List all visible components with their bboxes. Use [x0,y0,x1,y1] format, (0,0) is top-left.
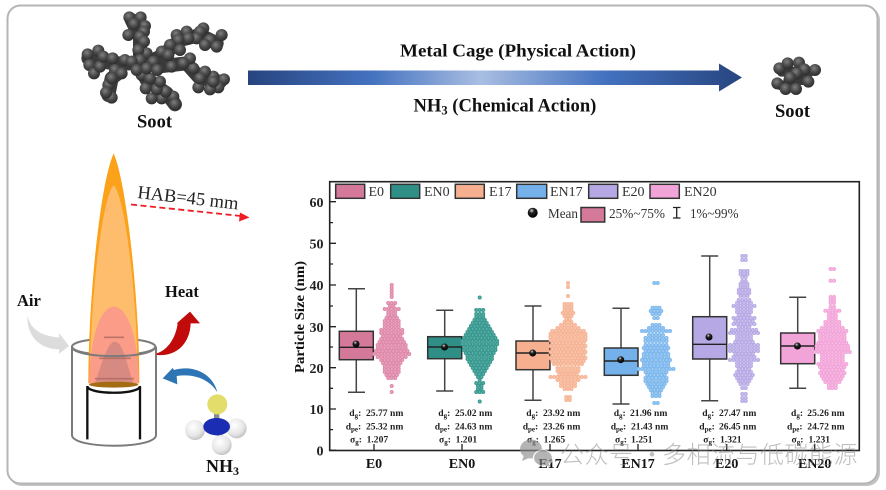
label: HAB: HAB=45 mm [136,183,240,215]
stats: EN0: g [444,412,448,420]
stats: EN17: g [620,439,624,447]
stats: EN20: σ [792,435,797,446]
stats: E0: d [346,422,351,432]
stats: EN17 [611,408,668,447]
stats: EN20: 24.72 nm [807,422,845,432]
stats: EN17: : [623,422,626,432]
stats: E0: g [355,439,359,447]
stats: E17: pe [528,426,535,434]
stats: EN17: d [611,422,616,432]
x axis labels: E20 [715,457,738,472]
stats: EN20: 1.231 [808,435,830,446]
gradient process arrow [248,64,742,92]
stats: EN17: σ [615,435,620,446]
y axis labels: 50 [310,238,324,252]
stats: E20: : [712,435,715,446]
stats: E17: d [523,422,528,432]
arrow: ammonia feed [163,368,217,392]
stats: EN20 [787,408,845,447]
legend: EN17 [550,185,583,200]
y axis labels: 40 [310,279,324,294]
burner and flame [72,153,156,446]
stats: EN0: d [438,408,444,419]
stats: EN20: d [787,422,792,432]
stats: EN17: 21.96 nm [630,408,667,419]
box plot: E20 [693,256,727,401]
stats: E0: 25.77 nm [366,408,403,419]
label: NH3 chemical action: 3 [441,104,448,118]
stats: E17: : [535,408,538,419]
stats: EN0: d [435,422,440,432]
swarm: E0 [374,285,409,392]
label: NH3: 3 [233,464,239,478]
label: NH3: NH [206,456,233,476]
stats: E20: g [708,412,712,420]
box plot: E17 [516,306,550,400]
x axis labels: EN20 [798,457,831,472]
y axis labels: 60 [310,196,324,211]
y axis labels: 0 [316,444,324,460]
stats: E0: : [358,422,361,432]
swarm: E17 [550,283,586,400]
arrow: air [27,315,69,354]
ammonia molecule [185,394,247,455]
stats: EN0: : [448,435,451,446]
watermark text: 公众号 [560,435,634,470]
stats: EN20: g [796,412,800,420]
stats: EN17: : [624,435,627,446]
swarm: EN20 [815,269,850,388]
soot aggregate small [771,57,821,95]
stats: E0 [346,408,403,447]
x axis labels: E17 [538,457,562,472]
label: NH3 chemical action: NH [414,96,441,116]
box plot: EN0 [428,310,462,391]
legend: E0 [368,185,384,200]
stats: E20: : [711,408,714,419]
label: soot left: Soot [137,112,173,132]
stats: E17: 23.26 nm [543,422,580,432]
label: heat: Heat [165,282,199,301]
stats: EN20: : [800,435,803,446]
stats: EN0: 1.201 [456,435,477,446]
y axis labels: 10 [310,403,324,418]
stats: EN20: : [800,408,803,419]
stats: E20: g [709,439,713,447]
stats: EN20: pe [792,426,799,434]
swarm: EN0 [462,298,497,402]
box plot: E0 [339,289,373,392]
label: soot right: Soot [775,102,811,122]
stats: EN0: : [447,408,450,419]
stats: E20: 1.321 [720,435,742,446]
x axis labels [366,457,831,472]
stats: EN0: 24.63 nm [455,422,492,432]
legend: Mean [548,207,578,222]
watermark text: · [640,435,664,470]
stats: EN0 [435,408,492,447]
stats: EN20: d [791,408,796,419]
y axis title: Particle Size (nm) [293,261,308,373]
stats: E20: 26.45 nm [719,422,756,432]
stats: EN17: 21.43 nm [631,422,668,432]
legend: E17 [489,185,512,200]
arrow: heat [157,312,200,355]
stats: EN0: : [447,422,450,432]
stats: EN17: pe [616,426,623,434]
x axis labels: E0 [366,457,382,472]
stats: EN0: g [444,439,448,447]
legend: 25%~75% [609,207,665,222]
stats: E17 [523,408,580,447]
icon: watermark chat [520,440,552,467]
stats: E17: : [535,422,538,432]
label: NH3 chemical action: (Chemical Action) [448,96,596,116]
legend: EN20 [684,185,717,200]
y axis labels: 20 [310,362,324,377]
stats: EN0: pe [440,426,447,434]
stats: E20: d [702,408,708,419]
legend [336,184,739,222]
stats: EN0: σ [439,435,444,446]
stats: E20: pe [705,426,712,434]
stats: E17: g [532,412,536,420]
stats: E0: : [359,435,362,446]
stats: EN20: g [797,439,801,447]
stats: E17: g [532,439,536,447]
x axis labels: EN17 [621,457,655,472]
y axis labels: 30 [310,321,324,336]
stats: E0: : [358,408,361,419]
stats: E17: σ [527,435,532,446]
stats: E20: σ [703,435,709,446]
arrow: HAB dashed [131,204,250,222]
stats: E0: 1.207 [367,435,388,446]
legend: 1%~99% [690,207,739,222]
stats: EN20: : [799,422,803,432]
stats: E20: : [712,422,715,432]
stats: EN17: d [614,408,619,419]
legend: E20 [622,185,645,200]
label: air: Air [17,291,41,310]
stats: E17: : [536,435,539,446]
label: metal cage: Metal Cage (Physical Action) [400,40,636,62]
stats: EN17: g [619,412,623,420]
stats: E20 [699,408,756,447]
stats: E17: d [526,408,532,419]
stats: E0: 25.32 nm [366,422,403,432]
swarm: E20 [730,256,758,401]
stats: E0: d [349,408,355,419]
stats: E20: 27.47 nm [719,408,756,419]
stats: E17: 23.92 nm [543,408,580,419]
stats: EN0: 25.02 nm [455,408,492,419]
stats: E0: g [355,412,359,420]
watermark text: 多相流与低碳能源 [662,435,858,470]
x axis labels: EN0 [449,457,475,472]
stats: EN17: 1.251 [631,435,653,446]
soot aggregate large [82,11,230,110]
y axis labels [310,196,324,460]
box plot: EN20 [781,297,815,388]
swarm: EN17 [638,283,674,403]
stats: EN17: : [623,408,626,419]
stats: EN20: 25.26 nm [807,408,845,419]
stats: E17: 1.265 [544,435,565,446]
stats: E20: d [699,422,705,432]
stats: E0: σ [350,435,355,446]
stats: E0: pe [351,426,358,434]
chart axes [330,182,859,450]
legend: EN0 [424,185,450,200]
box plot: EN17 [604,308,638,404]
